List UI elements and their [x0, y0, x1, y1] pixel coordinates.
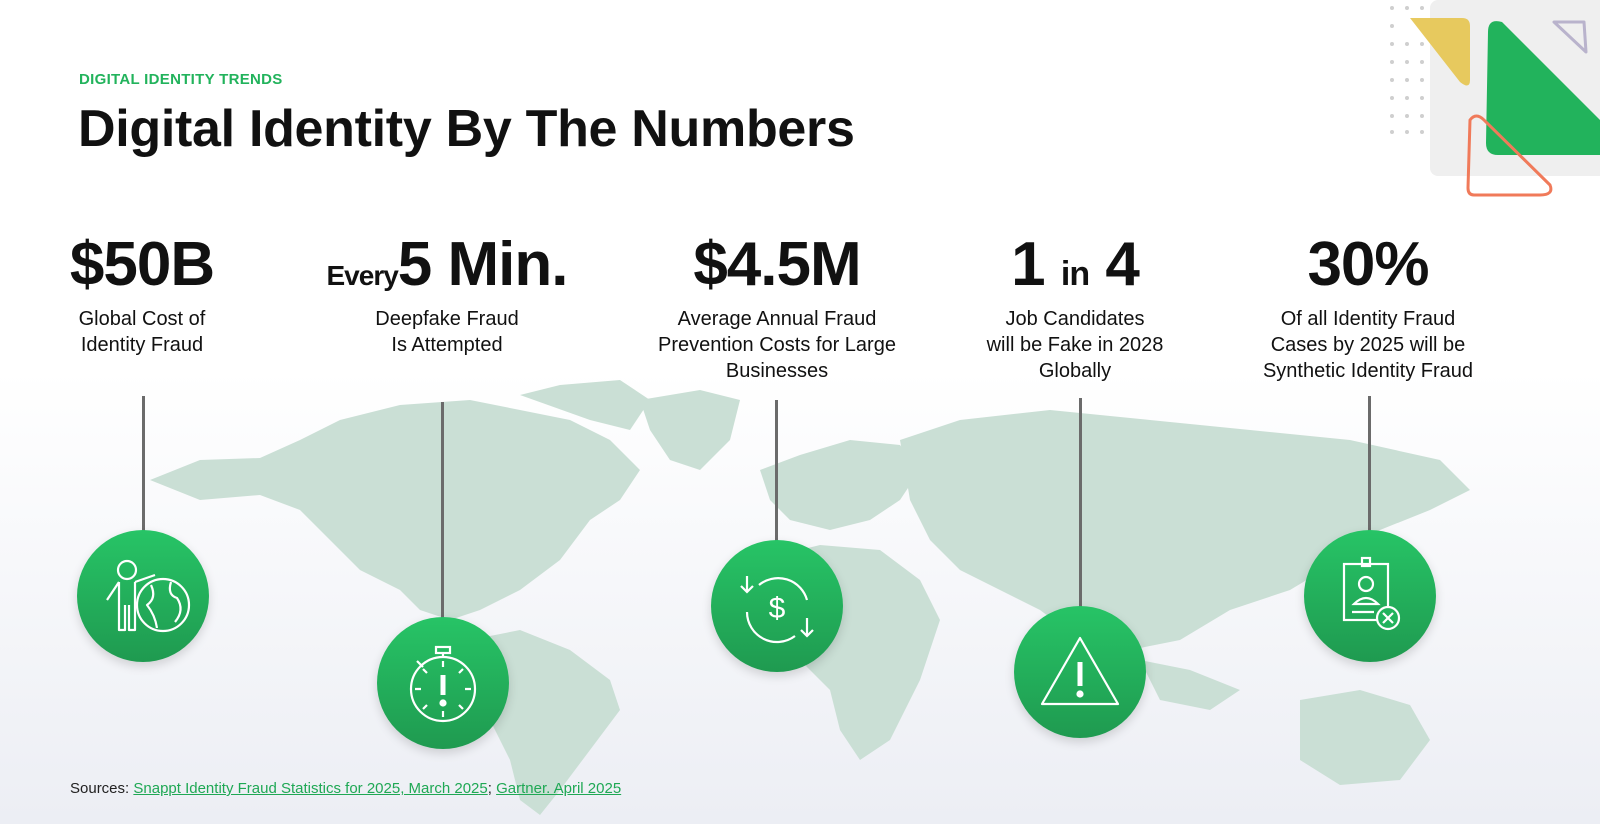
stat 4: Job Candidates: [1006, 308, 1144, 330]
africa: [760, 545, 940, 760]
stat 1: Identity Fraud: [81, 334, 203, 356]
south america: [470, 630, 620, 815]
north america: [150, 400, 640, 620]
icon: dollar cycle: $: [769, 592, 786, 625]
europe: [760, 440, 920, 530]
stat 2: Every5 Min.: [326, 230, 567, 299]
stat 2: Deepfake Fraud: [375, 308, 519, 330]
stat 3: Businesses: [726, 360, 828, 382]
icon: dollar cycle: [711, 540, 843, 672]
stat 5: Cases by 2025 will be: [1271, 334, 1465, 356]
stat 3: Average Annual Fraud: [678, 308, 876, 330]
icon: warning triangle: [1014, 606, 1146, 738]
stat 1: Global Cost of: [79, 308, 205, 330]
icon: id card with x: [1304, 530, 1436, 662]
stat 4: [986, 230, 1163, 382]
stat 5: Of all Identity Fraud: [1281, 308, 1455, 330]
stat 1: [70, 230, 214, 356]
greenland: [640, 390, 740, 470]
sources: Sources: Snappt Identity Fraud Statistics for 2025, March 2025; Gartner. April 2025: [70, 780, 621, 797]
stat 1: $50B: [70, 230, 214, 299]
icon: stopwatch: [377, 617, 509, 749]
stat 2: [326, 230, 567, 356]
stat 3: $4.5M: [693, 230, 861, 299]
decorative shapes top right: [1390, 0, 1600, 196]
stat 2: Is Attempted: [391, 334, 503, 356]
stat 4: Globally: [1039, 360, 1111, 382]
stat 3: Prevention Costs for Large: [658, 334, 896, 356]
icon: person with globe: [77, 530, 209, 662]
title: Digital Identity By The Numbers: [78, 100, 855, 158]
stat 5: [1263, 230, 1473, 382]
stat 4: will be Fake in 2028: [987, 334, 1163, 356]
stat 5: Synthetic Identity Fraud: [1263, 360, 1473, 382]
australia: [1300, 690, 1430, 785]
stat 4: 1 in 4: [1011, 230, 1139, 299]
stat 3: [658, 230, 896, 382]
asia: [900, 410, 1470, 650]
stat 5: 30%: [1307, 230, 1429, 299]
eyebrow: DIGITAL IDENTITY TRENDS: [79, 71, 283, 88]
